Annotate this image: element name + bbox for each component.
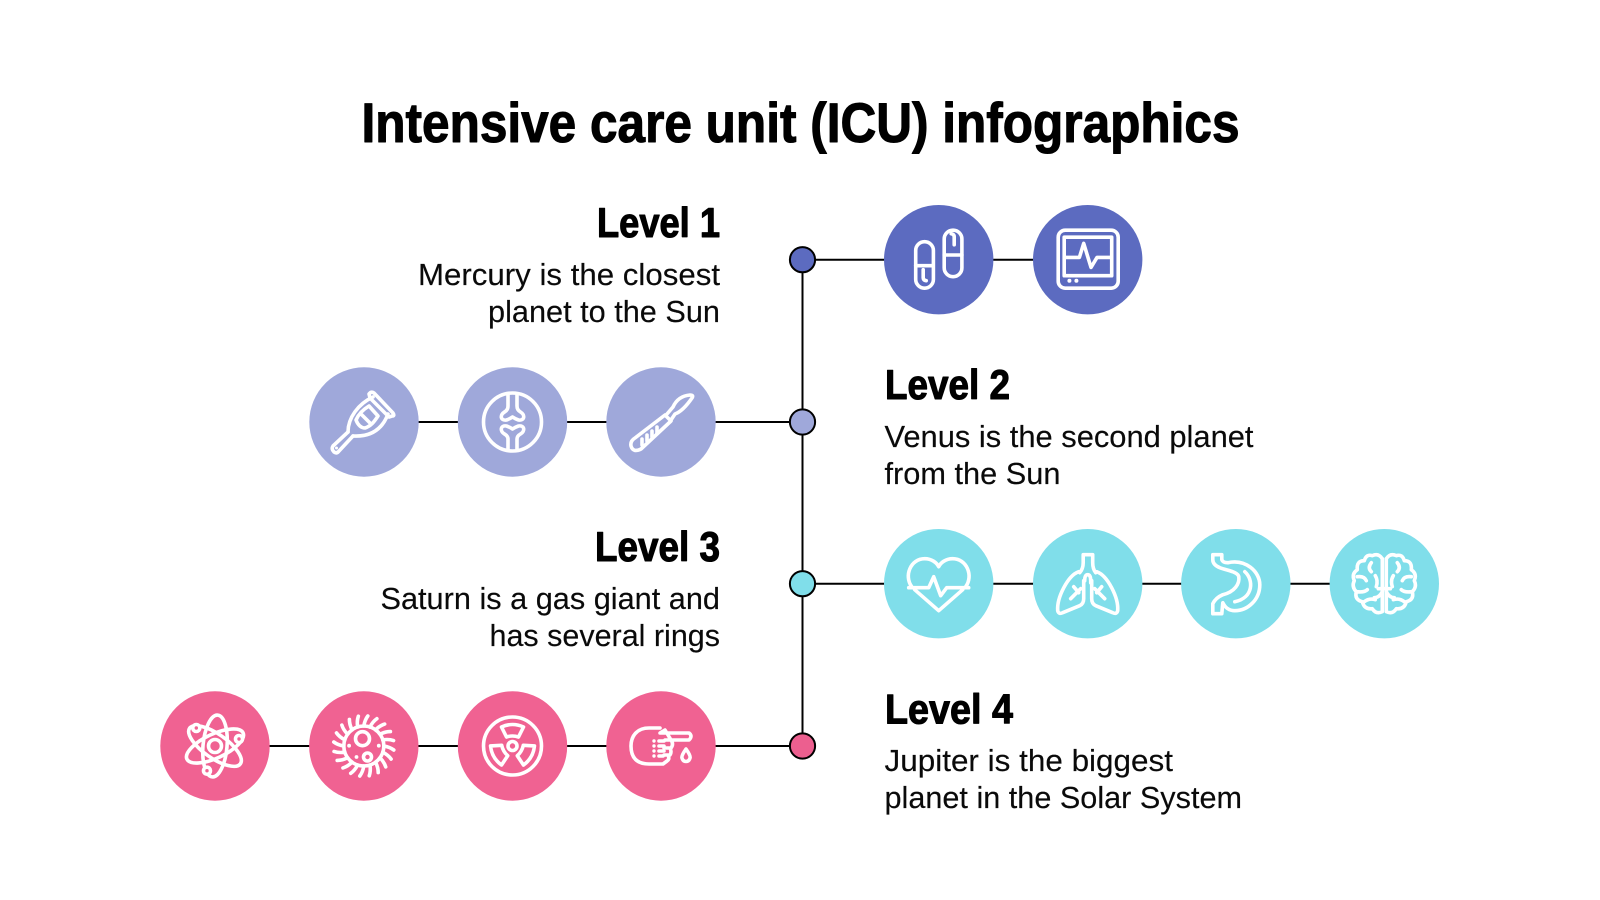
level 3 text block [380, 523, 720, 653]
icon: heartbeat [884, 529, 993, 638]
timeline spine [802, 260, 804, 746]
title: Intensive care unit (ICU) infographics [362, 91, 1240, 154]
level 1 text block: Level 1 [597, 199, 720, 246]
level 3 text block: Saturn is a gas giant and [380, 582, 720, 616]
level 4 text block: Jupiter is the biggest [884, 744, 1174, 778]
level 1 text block: Mercury is the closest [418, 258, 721, 292]
panel: level 3 [380, 523, 1439, 653]
level 2 text block: Level 2 [885, 361, 1010, 408]
icon: brain [1330, 529, 1439, 638]
icon: lungs [1033, 529, 1142, 638]
icon: scalpel [606, 367, 716, 477]
icon: crutch [309, 367, 419, 477]
level 4 text block [884, 686, 1242, 815]
icon: bone joint [458, 367, 567, 477]
level 3 text block: Level 3 [595, 523, 720, 570]
level 4 text block: planet in the Solar System [884, 781, 1242, 815]
level 1 connector line [802, 259, 1087, 261]
panel: level 2 [309, 361, 1254, 491]
panel: level 1 [418, 199, 1142, 329]
icon: heart monitor [1033, 205, 1142, 314]
level 4 text block: Level 4 [885, 686, 1014, 732]
level 2 text block [884, 361, 1254, 491]
level 3 connector line [802, 583, 1384, 585]
icon: virus cell [309, 691, 418, 801]
level 4 node [790, 733, 815, 759]
level 4 connector line [215, 745, 802, 747]
level 3 text block: has several rings [490, 619, 720, 653]
panel: level 4 [160, 686, 1242, 815]
level 2 node [790, 409, 815, 435]
level 3 node [790, 571, 815, 596]
icon: atom [160, 691, 270, 801]
level 2 connector line [364, 421, 802, 423]
level 1 text block: planet to the Sun [488, 295, 720, 329]
level 1 node [790, 247, 815, 272]
level 1 text block [418, 199, 721, 329]
icon: finger blood drop [606, 691, 716, 801]
level 2 text block: from the Sun [884, 457, 1060, 491]
icon: stomach [1181, 529, 1290, 638]
icon: pills [884, 205, 993, 314]
icon: radiation [458, 691, 567, 801]
level 2 text block: Venus is the second planet [884, 420, 1254, 454]
